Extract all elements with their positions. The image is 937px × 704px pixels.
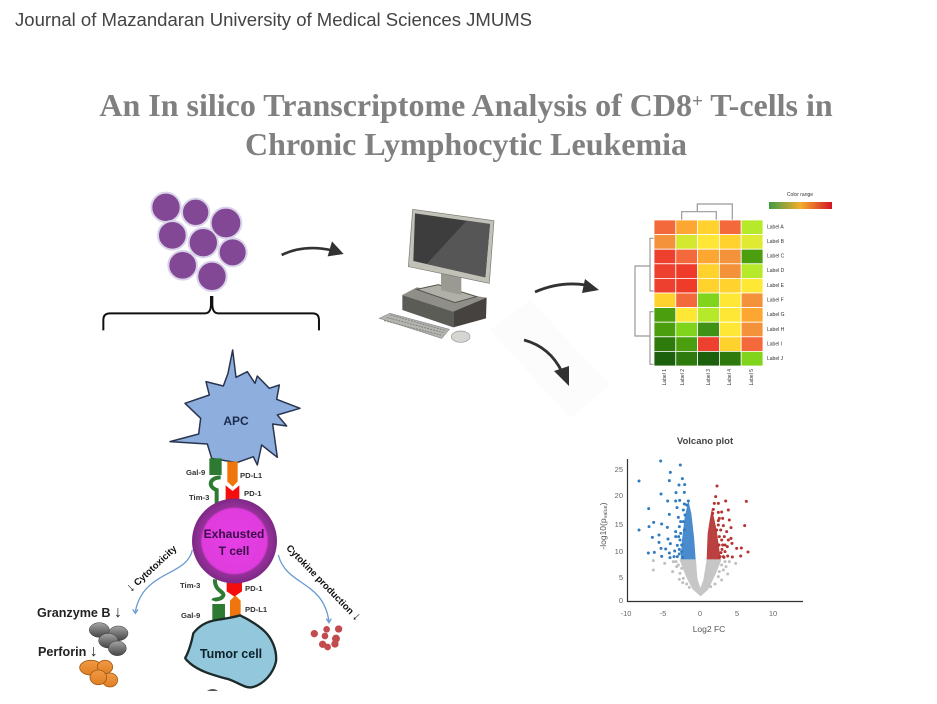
exhausted T cell — [192, 498, 277, 584]
title — [99, 87, 833, 162]
heatmap row labels: Label B — [767, 239, 785, 245]
heatmap row labels: Label C — [767, 254, 785, 260]
heatmap row labels: Label A — [767, 224, 784, 230]
upper receptor labels — [186, 468, 263, 502]
upper receptor labels: PD-1 — [244, 489, 262, 498]
label: cytokine production: Cytokine production ↓ — [284, 540, 365, 624]
heatmap row labels: Label F — [767, 298, 784, 304]
volcano axis titles: -log10(p — [598, 518, 608, 550]
volcano y tick labels: 20 — [615, 491, 623, 500]
label: perforin: Perforin ↓ — [38, 643, 98, 660]
icon: cluster of CD8 T-cells — [151, 193, 247, 291]
color range legend: Color range — [787, 192, 813, 198]
label: granzyme B: Granzyme B ↓ — [37, 604, 122, 621]
heatmap row labels — [767, 224, 785, 362]
journal name: Journal of Mazandaran University of Medical Sciences JMUMS — [15, 9, 532, 30]
heatmap column labels: Label 5 — [749, 369, 755, 385]
small grey cell fragment — [207, 689, 218, 691]
volcano y tick labels: 0 — [619, 596, 623, 605]
arrow: computer to heatmap — [535, 279, 599, 293]
exhausted T cell: T cell — [219, 544, 249, 558]
icon: APC cell — [170, 350, 300, 465]
title: Chronic Lymphocytic Leukemia — [245, 126, 687, 162]
volcano points — [639, 461, 748, 596]
arrow: computer to volcano plot — [524, 340, 569, 386]
upper receptor labels: Tim-3 — [189, 493, 209, 502]
arrow: cytotoxicity — [133, 550, 192, 613]
icon: cytokine dots — [311, 625, 342, 650]
heatmap column labels — [662, 369, 755, 385]
volcano axis titles: Log2 FC — [693, 624, 725, 634]
brace under the cell cluster — [103, 296, 319, 330]
heatmap column labels: Label 1 — [662, 369, 668, 385]
volcano x tick labels: 10 — [769, 609, 777, 618]
volcano y tick labels: 10 — [615, 547, 623, 556]
heatmap row labels: Label E — [767, 283, 785, 289]
lower receptor labels: PD-1 — [245, 584, 263, 593]
blue down-regulated points — [639, 461, 696, 559]
heatmap column labels: Label 3 — [706, 369, 712, 385]
volcano y tick labels — [615, 465, 623, 605]
volcano x tick labels — [621, 609, 777, 618]
exhausted T cell: Exhausted — [204, 527, 264, 541]
dendrograms — [635, 204, 732, 364]
upper receptor labels: Gal-9 — [186, 468, 205, 477]
heatmap column labels: Label 4 — [727, 369, 733, 385]
volcano title: Volcano plot — [677, 436, 734, 447]
heatmap row labels: Label I — [767, 342, 782, 348]
tumor cell: Tumor cell — [200, 647, 262, 661]
label: cytotoxicity: ↓ Cytotoxicity — [123, 540, 180, 595]
volcano x tick labels: 5 — [735, 609, 739, 618]
heatmap column labels: Label 2 — [680, 369, 686, 385]
icon: desktop computer — [379, 209, 494, 342]
heatmap row labels: Label D — [767, 268, 785, 274]
lower receptor labels — [180, 581, 268, 620]
chart: heatmap — [635, 192, 832, 385]
heatmap cells — [654, 220, 763, 366]
volcano x tick labels: -5 — [660, 609, 666, 618]
heatmap row labels: Label J — [767, 356, 784, 362]
volcano y tick labels: 5 — [619, 573, 623, 582]
volcano axis titles: value — [603, 505, 609, 518]
lower receptor labels: PD-L1 — [245, 605, 268, 614]
arrow: cells to computer — [282, 241, 344, 256]
volcano x tick labels: -10 — [621, 609, 631, 618]
diagram: immune exhaustion — [37, 350, 365, 691]
icon: perforin granules — [80, 660, 118, 687]
volcano x tick labels: 0 — [698, 609, 702, 618]
upper receptor pairs — [209, 458, 239, 503]
volcano y tick labels: 15 — [615, 520, 623, 529]
tumor cell — [185, 615, 276, 687]
title: An In silico Transcriptome Analysis of CD8+ T-cells in — [99, 87, 833, 123]
lower receptor labels: Tim-3 — [180, 581, 200, 590]
volcano y tick labels: 25 — [615, 465, 623, 474]
chart: volcano plot — [598, 436, 803, 634]
heatmap row labels: Label G — [767, 312, 785, 318]
red up-regulated points — [707, 486, 748, 559]
color range legend — [769, 192, 832, 209]
icon: granzyme granules — [89, 623, 128, 656]
icon: APC cell: APC — [223, 414, 249, 428]
upper receptor labels: PD-L1 — [240, 471, 263, 480]
lower receptor labels: Gal-9 — [181, 611, 200, 620]
arrow: cytokine production — [278, 555, 331, 623]
heatmap row labels: Label H — [767, 327, 785, 333]
lower receptor pairs — [212, 579, 242, 620]
grey non-significant points — [653, 559, 736, 596]
faint background diamond — [490, 300, 610, 418]
volcano axis titles: ) — [598, 502, 608, 505]
volcano axes — [628, 459, 803, 602]
volcano axis titles — [598, 502, 725, 634]
